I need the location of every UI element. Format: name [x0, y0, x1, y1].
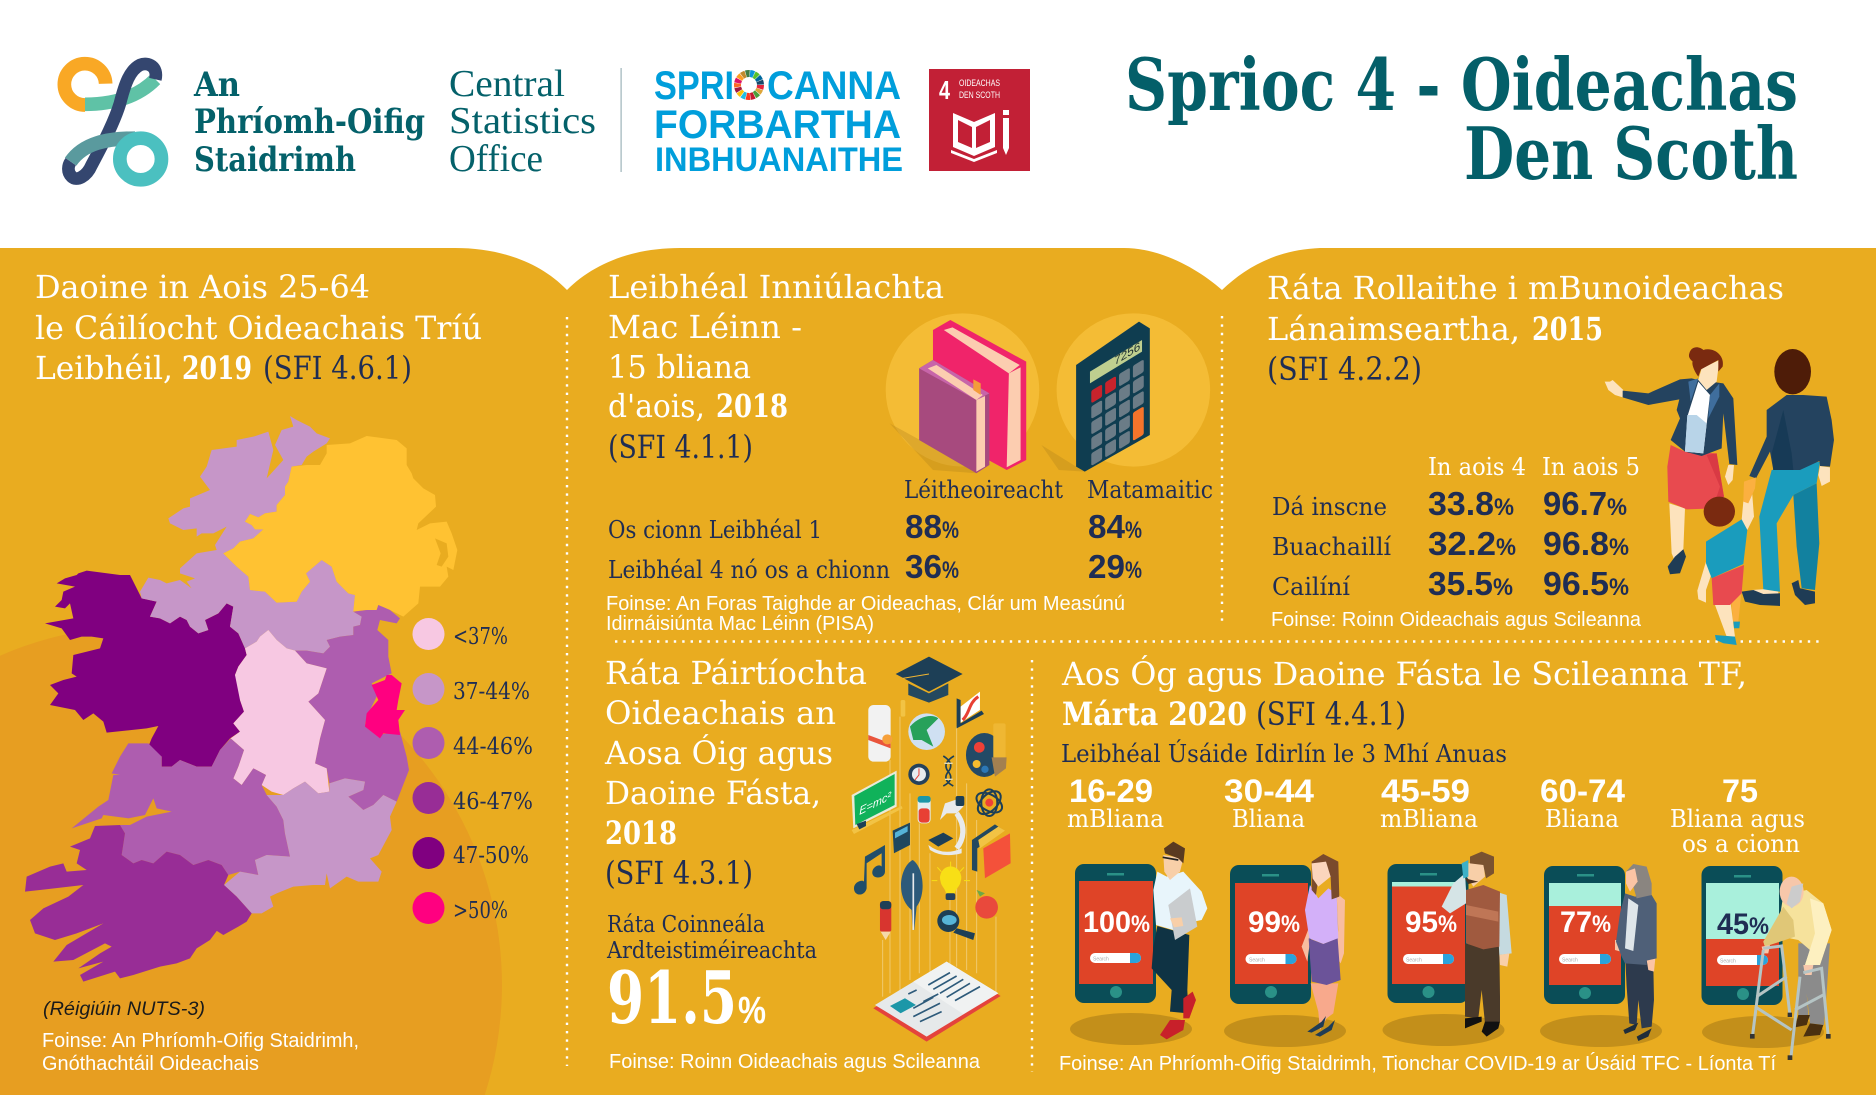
logo: CSO knot	[64, 64, 161, 180]
organisation name in English: Office	[449, 138, 543, 180]
row: level 4 or above: 36	[905, 548, 942, 585]
panel: participation rate	[604, 654, 1011, 1073]
retention rate label: Ráta Coinneála	[607, 912, 765, 938]
column labels: reading and maths: Matamaitic	[1087, 476, 1213, 504]
icon: SDG 4 badge: 4	[939, 75, 950, 105]
row: above level 1: 84	[1088, 508, 1126, 545]
heading: proficiency: d'aois,	[608, 387, 705, 425]
shadows under phones	[1070, 1013, 1824, 1048]
organisation name in Irish: An	[193, 65, 240, 105]
row: girls	[1272, 565, 1629, 602]
heading: participation	[604, 654, 867, 892]
row: both sexes: 96.7	[1543, 485, 1607, 522]
source: enrolment: Foinse: Roinn Oideachais agus Scileanna	[1271, 609, 1642, 631]
heading: participation: Oideachais an	[605, 694, 836, 732]
age group labels: mBliana	[1067, 805, 1164, 833]
heading: proficiency: (SFI 4.1.1)	[608, 428, 753, 466]
heading: ICT skills: (SFI 4.4.1)	[1256, 695, 1406, 733]
icon: SDG 4 badge: DEN SCOTH	[959, 90, 1000, 101]
row: boys: %	[1609, 534, 1629, 561]
age group labels: 45-59	[1381, 773, 1470, 809]
phone: 60-74 77%: 77	[1560, 906, 1592, 939]
SDG wordmark: CANNA	[767, 64, 901, 108]
table column heads: In aois 4	[1428, 453, 1526, 481]
age group labels: mBliana	[1380, 805, 1478, 833]
row: both sexes	[1272, 485, 1627, 522]
heading: participation: Daoine Fásta,	[605, 774, 821, 812]
heading: tertiary education: Leibhéil,	[35, 349, 173, 387]
icon: SDG colour wheel	[738, 74, 760, 96]
header band	[64, 42, 1798, 196]
column labels: reading and maths: Léitheoireacht	[904, 476, 1063, 504]
phone: 75+ 45%: 45	[1717, 908, 1749, 941]
row: girls: %	[1609, 574, 1629, 601]
figure: woman in lilac	[1302, 854, 1345, 1037]
heading: enrolment: Ráta Rollaithe i mBunoideachas	[1267, 269, 1784, 307]
heading: ICT skills: Aos Óg agus Daoine Fásta le Scileanna TF,	[1061, 655, 1747, 693]
row: girls: %	[1493, 574, 1513, 601]
heading: proficiency: 2018	[716, 387, 788, 425]
phone: 75+ 45%: Search	[1720, 958, 1736, 964]
row: both sexes: 33.8	[1428, 485, 1494, 522]
phone: 60-74 77%	[1544, 866, 1625, 1004]
heading: tertiary education: le Cáilíocht Oideachais Tríú	[35, 309, 482, 347]
phone: 16-29 100%: 100	[1083, 906, 1131, 939]
SDG wordmark: FORBARTHA	[654, 103, 901, 147]
age group labels: 30-44	[1224, 773, 1314, 809]
row: level 4 or above: %	[942, 557, 959, 584]
heading: proficiency: Leibhéal Inniúlachta	[608, 268, 944, 306]
row: both sexes: %	[1494, 494, 1514, 521]
row: boys: 32.2	[1428, 525, 1496, 562]
panel: internet use by age	[1059, 655, 1832, 1075]
phone: 30-44 99%: 99	[1248, 906, 1281, 939]
heading: proficiency: Mac Léinn -	[608, 308, 802, 346]
panel: tertiary education map	[25, 268, 533, 1075]
organisation name in English	[449, 63, 596, 180]
phone: 60-74 77%: Search	[1562, 958, 1578, 964]
retention rate figure: 91.5	[607, 955, 737, 1040]
title: Den Scoth	[1464, 111, 1798, 196]
source: retention: Foinse: Roinn Oideachais agus Scileanna	[609, 1051, 981, 1073]
icon: books	[886, 313, 1039, 473]
row: boys: 96.8	[1543, 525, 1609, 562]
phone: 75+ 45%	[1702, 866, 1782, 1005]
age group labels: 75	[1722, 773, 1758, 809]
age group labels: Bliana	[1232, 805, 1305, 833]
heading: tertiary education: (SFI 4.6.1)	[263, 349, 412, 387]
icon: SDG 4 badge	[929, 69, 1030, 171]
source: ICT: Foinse: An Phríomh-Oifig Staidrimh, Tionchar COVID-19 ar Úsáid TFC - Líonta Tí	[1059, 1052, 1776, 1075]
phone: 75+ 45%: %	[1749, 913, 1769, 940]
map legend: 46-47%	[453, 789, 533, 815]
organisation name in English: Central	[449, 63, 565, 105]
SDG wordmark	[654, 64, 903, 179]
table column heads	[1428, 453, 1640, 481]
heading: tertiary education: Daoine in Aois 25-64	[35, 268, 370, 306]
row: boys: %	[1496, 534, 1516, 561]
phone: 60-74 77%: %	[1592, 911, 1611, 938]
phone: 45-59 95%	[1388, 864, 1468, 1003]
organisation name in English: Statistics	[449, 100, 596, 142]
row: above level 1: Os cionn Leibhéal 1	[608, 516, 822, 544]
organisation name in Irish: Phríomh-Oifig	[194, 102, 425, 142]
gold background panel	[0, 248, 1876, 1095]
heading: tertiary education	[35, 268, 482, 387]
heading: enrolment: Lánaimseartha,	[1267, 310, 1520, 348]
SDG wordmark: SPRI	[654, 64, 734, 108]
phone: 16-29 100%: %	[1131, 911, 1150, 938]
heading: proficiency	[608, 268, 944, 466]
organisation name in Irish	[193, 65, 425, 180]
subheading: Leibhéal Úsáide Idirlín le 3 Mhí Anuas	[1061, 739, 1507, 768]
icon: calculator: 7256	[1114, 339, 1140, 368]
row: girls: 35.5	[1428, 565, 1493, 602]
source: map	[42, 1030, 359, 1075]
heading: ICT skills	[1061, 655, 1747, 733]
SDG wordmark: INBHUANAITHE	[655, 141, 903, 179]
age group labels	[1067, 773, 1805, 858]
row: both sexes: Dá inscne	[1272, 493, 1387, 521]
heading: tertiary education: 2019	[182, 349, 252, 387]
source: PISA: Foinse: An Foras Taighde ar Oideachas, Clár um Measúnú	[606, 593, 1125, 615]
panel: student proficiency	[606, 268, 1213, 635]
figure: elderly man with walker	[1750, 877, 1832, 1060]
map legend: <37%	[453, 624, 508, 650]
row: above level 1: %	[942, 517, 959, 544]
heading: participation: (SFI 4.3.1)	[605, 854, 753, 892]
row: boys	[1272, 525, 1629, 562]
heading: participation: 2018	[605, 814, 677, 852]
age group labels: 60-74	[1540, 773, 1625, 809]
heading: proficiency: 15 bliana	[608, 348, 751, 386]
icon: education objects rising from open book	[852, 657, 1011, 1042]
map legend: 47-50%	[453, 843, 529, 869]
row: level 4 or above: %	[1125, 557, 1142, 584]
heading: participation: Aosa Óig agus	[604, 734, 833, 772]
source: map: Gnóthachtáil Oideachais	[42, 1053, 259, 1075]
darker orange circle behind map	[0, 626, 502, 1095]
phone: 30-44 99%: Search	[1249, 958, 1265, 964]
organisation name in Irish: Staidrimh	[194, 140, 356, 180]
title	[1125, 42, 1798, 196]
heading: ICT skills: Márta 2020	[1062, 695, 1247, 733]
phone: 16-29 100%: Search	[1093, 956, 1109, 962]
row: girls: 96.5	[1543, 565, 1609, 602]
icon: teacher, parent and child	[1605, 347, 1834, 645]
figure: young man	[1152, 842, 1207, 1039]
table column heads: In aois 5	[1542, 453, 1640, 481]
row: level 4 or above: 29	[1088, 548, 1125, 585]
retention rate label: Ardteistiméireachta	[606, 938, 817, 964]
row: level 4 or above	[608, 548, 1142, 585]
icon: calculator	[1041, 313, 1210, 472]
map legend: >50%	[453, 898, 508, 924]
phone: 30-44 99%	[1230, 865, 1311, 1004]
icon: education objects rising from open book: E=mc²	[859, 788, 892, 818]
map of Ireland by NUTS-3 region	[25, 416, 457, 982]
heading: enrolment: 2015	[1532, 310, 1603, 348]
heading: enrolment: (SFI 4.2.2)	[1267, 350, 1422, 388]
figure: man on phone	[1442, 852, 1512, 1037]
age group labels: Bliana	[1545, 805, 1619, 833]
source: PISA	[606, 593, 1125, 635]
panel: primary enrolment	[1267, 269, 1834, 645]
column labels: reading and maths	[904, 476, 1213, 504]
row: boys: Buachaillí	[1272, 533, 1391, 561]
phone: 45-59 95%: Search	[1406, 958, 1422, 964]
icon: SDG 4 badge: OIDEACHAS	[959, 78, 1000, 89]
row: girls: Cailíní	[1272, 573, 1350, 601]
row: above level 1: 88	[905, 508, 942, 545]
source: map: Foinse: An Phríomh-Oifig Staidrimh,	[42, 1030, 359, 1052]
figure: grey-haired woman	[1615, 864, 1657, 1041]
row: above level 1	[608, 508, 1142, 545]
heading: participation: Ráta Páirtíochta	[605, 654, 867, 692]
retention rate figure: %	[738, 990, 766, 1032]
map legend: 44-46%	[453, 734, 533, 760]
phone: 16-29 100%	[1075, 864, 1156, 1003]
age group labels: os a cionn	[1682, 830, 1800, 858]
age group labels: Bliana agus	[1670, 805, 1805, 833]
phone: 45-59 95%: %	[1438, 911, 1457, 938]
row: above level 1: %	[1125, 517, 1142, 544]
map note: (Réigiúin NUTS-3)	[43, 999, 205, 1020]
row: both sexes: %	[1607, 494, 1627, 521]
phone: 45-59 95%: 95	[1405, 906, 1438, 939]
source: PISA: Idirnáisiúnta Mac Léinn (PISA)	[606, 613, 874, 635]
map legend: 37-44%	[453, 679, 530, 705]
retention rate label	[606, 912, 817, 964]
map legend	[412, 618, 533, 924]
age group labels: 16-29	[1069, 773, 1153, 809]
heading: enrolment	[1267, 269, 1784, 388]
row: level 4 or above: Leibhéal 4 nó os a chionn	[608, 556, 890, 584]
phone: 30-44 99%: %	[1281, 911, 1300, 938]
